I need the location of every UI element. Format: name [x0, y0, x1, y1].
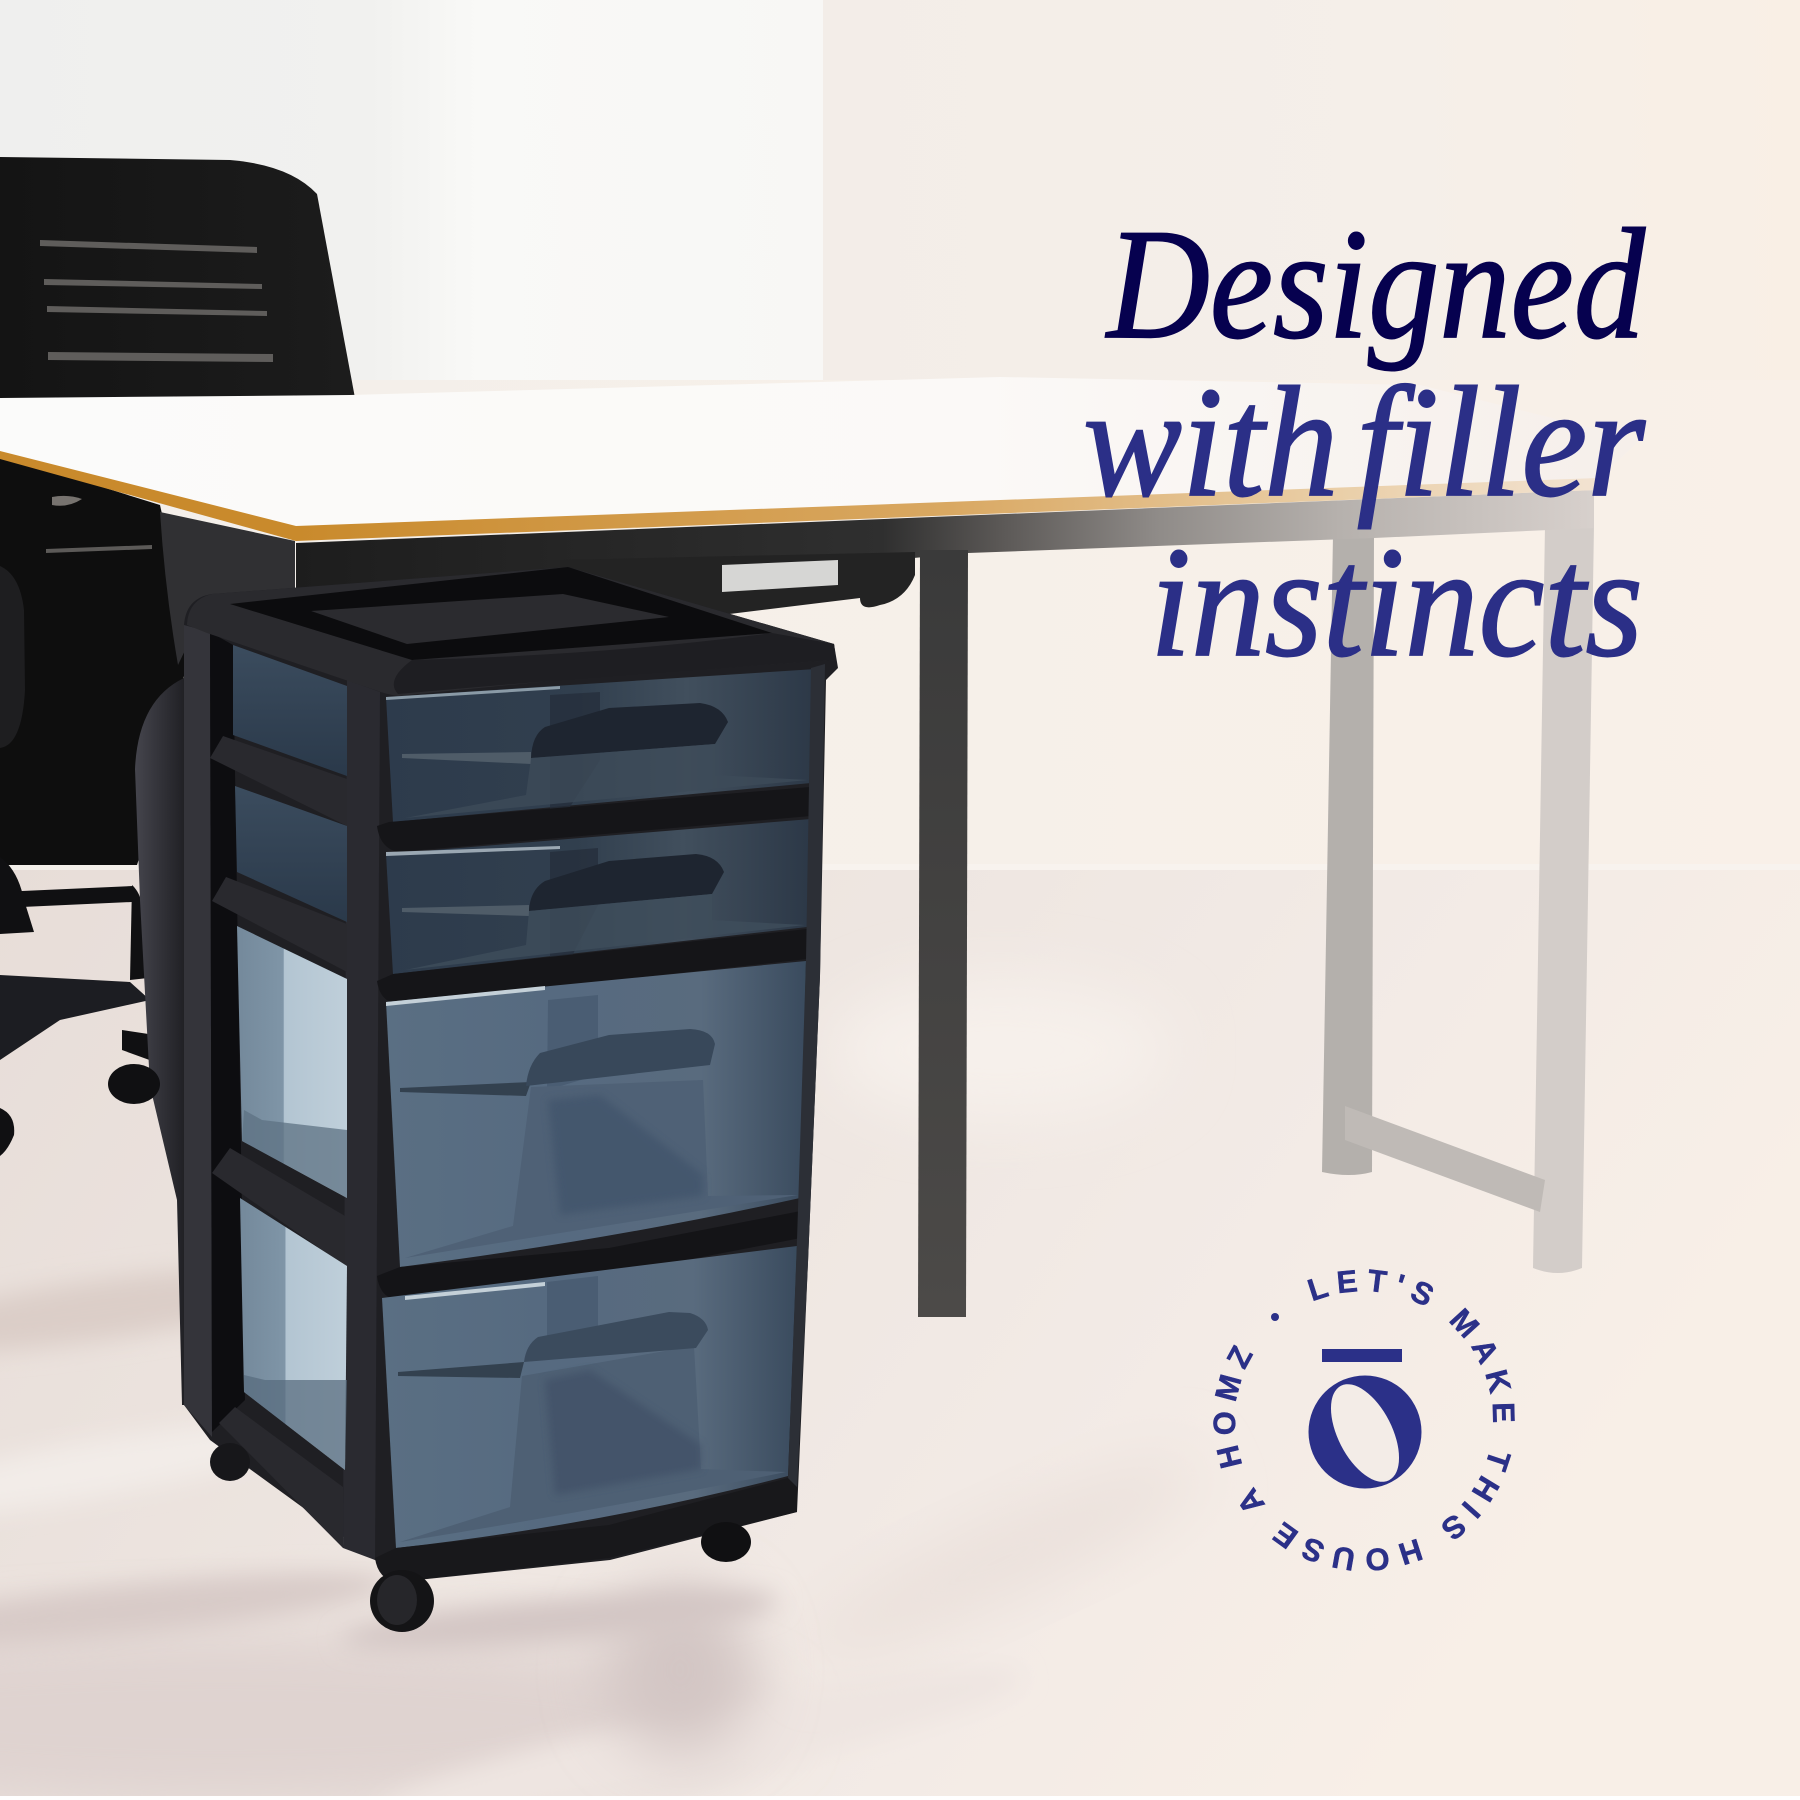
- side window 3: [237, 926, 347, 1198]
- desk top: [0, 377, 1640, 527]
- side window 2: [235, 786, 347, 922]
- chair back: [0, 157, 355, 398]
- drawer 4 handle: [524, 1312, 708, 1362]
- drawer 4: [382, 1246, 797, 1548]
- band 3: [377, 1210, 806, 1300]
- desk apron: [296, 490, 1594, 620]
- drawer 2: [386, 819, 811, 974]
- chair caster: [108, 1064, 160, 1104]
- desk: [0, 377, 1640, 1317]
- chair support under desk: [160, 512, 295, 665]
- plastic storage cart: [184, 567, 838, 1632]
- desk legs: [1322, 535, 1374, 1175]
- band 1: [377, 786, 822, 852]
- slogan dot: [1271, 1313, 1279, 1321]
- logo badge: [1213, 1269, 1515, 1571]
- side window 1: [233, 645, 347, 776]
- desk front leg: [918, 550, 968, 1317]
- chair armrest: [0, 566, 25, 748]
- drawer 4 pocket: [400, 1346, 786, 1542]
- side rail 2: [212, 877, 347, 972]
- chair seat and lower back: [0, 455, 190, 865]
- drawer 3 pocket: [405, 1080, 798, 1258]
- corner post: [343, 680, 380, 1560]
- right frame strip: [788, 664, 825, 1487]
- background: wooden floor: [0, 870, 1800, 1800]
- office chair: [0, 157, 355, 1156]
- logo bar: [1322, 1349, 1402, 1362]
- side rail 4: [219, 1407, 343, 1548]
- cart: black chair arm behind: [135, 678, 190, 1405]
- drawer 3 handle: [526, 1029, 715, 1086]
- side rail 3: [212, 1148, 345, 1266]
- side window 4: [240, 1198, 347, 1470]
- logo ring: [1308, 1374, 1422, 1492]
- band 2: [377, 928, 816, 1004]
- cart frame: [184, 567, 838, 1582]
- side rail 1: [210, 736, 347, 826]
- circular slogan: LET'S MAKE THIS HOUSE A HOMZ: [1213, 1269, 1515, 1571]
- cart left column: [184, 625, 212, 1437]
- chair back slats: [40, 240, 273, 362]
- drawer 1 handle: [531, 703, 728, 758]
- drawer 2 handle: [529, 854, 724, 911]
- headline line 2: with filler: [1083, 355, 1645, 530]
- desk bracket: [560, 552, 915, 625]
- band 4: [375, 1478, 797, 1582]
- drawer 1: [386, 669, 816, 822]
- background: room walls: [0, 0, 1800, 880]
- headline: [1083, 197, 1646, 690]
- headline line 3: instincts: [1150, 515, 1643, 690]
- cart top: tray: [187, 567, 836, 696]
- drawer 3: [386, 961, 806, 1267]
- wheels: [210, 1443, 751, 1632]
- headline line 1: Designed: [1105, 197, 1646, 372]
- chair base: [0, 857, 155, 1156]
- desk orange edge: [0, 451, 1598, 541]
